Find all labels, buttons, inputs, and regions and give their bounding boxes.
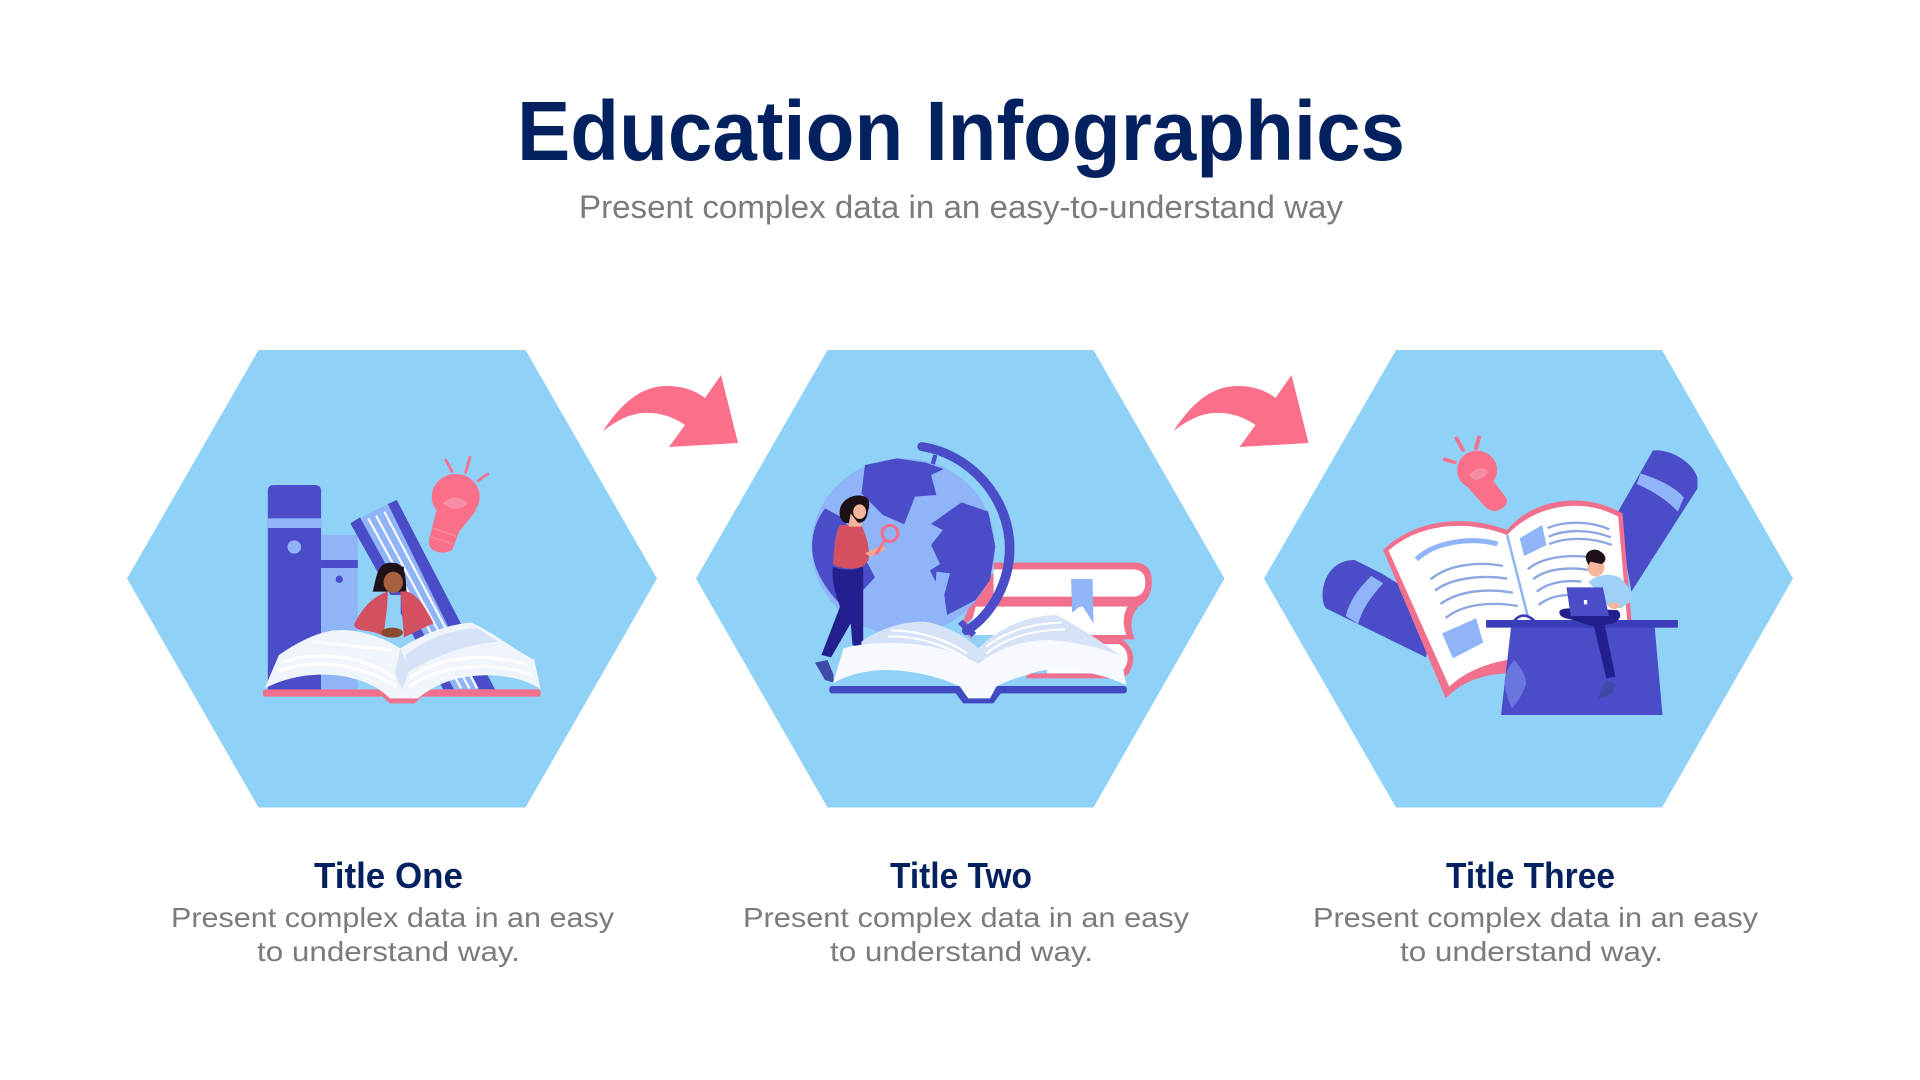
text block: title three: to understand way. bbox=[1400, 936, 1663, 967]
text block: title three bbox=[1313, 855, 1758, 967]
illustration: books, reader and bulb bbox=[263, 457, 541, 703]
text block: title two: Present complex data in an easy bbox=[743, 902, 1189, 933]
globe bbox=[811, 458, 995, 635]
stacked books bbox=[961, 563, 1152, 678]
text block: title one: Title One bbox=[314, 855, 463, 896]
left rolled book bbox=[1322, 560, 1435, 657]
hexagon one bbox=[127, 350, 657, 808]
title: Education Infographics bbox=[517, 84, 1405, 178]
light bulb bbox=[1445, 437, 1507, 511]
text block: title two: to understand way. bbox=[830, 936, 1093, 967]
illustration: globe, books and woman bbox=[811, 447, 1152, 703]
text block: title two: Title Two bbox=[890, 855, 1032, 896]
text block: title three: Present complex data in an easy bbox=[1313, 902, 1758, 933]
woman with magnifier bbox=[815, 495, 898, 683]
text block: title three: Title Three bbox=[1446, 855, 1615, 896]
tall book bbox=[268, 485, 321, 690]
text block: title one: Present complex data in an easy bbox=[171, 902, 614, 933]
panel: step three hexagon illustration bbox=[1264, 350, 1793, 808]
text block: title one: to understand way. bbox=[257, 936, 520, 967]
subtitle: Present complex data in an easy-to-understand way bbox=[579, 189, 1343, 225]
light bulb bbox=[429, 457, 488, 553]
illustration: graduation cap, book and student bbox=[1322, 437, 1697, 715]
hexagon two bbox=[696, 350, 1224, 808]
student with laptop bbox=[1559, 550, 1632, 700]
open textbook bbox=[1383, 500, 1631, 698]
leaning book bbox=[350, 500, 495, 689]
panel: step one hexagon illustration bbox=[127, 350, 657, 808]
graduation cap bbox=[1486, 616, 1678, 715]
arrow: two to three bbox=[1174, 375, 1308, 447]
open book bbox=[263, 623, 541, 703]
globe stand bbox=[922, 447, 1010, 635]
right rolled book bbox=[1617, 450, 1697, 592]
hexagon three bbox=[1264, 350, 1793, 808]
short book bbox=[321, 535, 358, 690]
open book bbox=[829, 615, 1127, 703]
text block: title one bbox=[171, 855, 614, 967]
panel: step two hexagon illustration bbox=[696, 350, 1224, 808]
text block: title two bbox=[743, 855, 1189, 967]
arrow: one to two bbox=[603, 375, 738, 447]
bookmark bbox=[1071, 579, 1094, 623]
reading woman bbox=[354, 563, 434, 638]
